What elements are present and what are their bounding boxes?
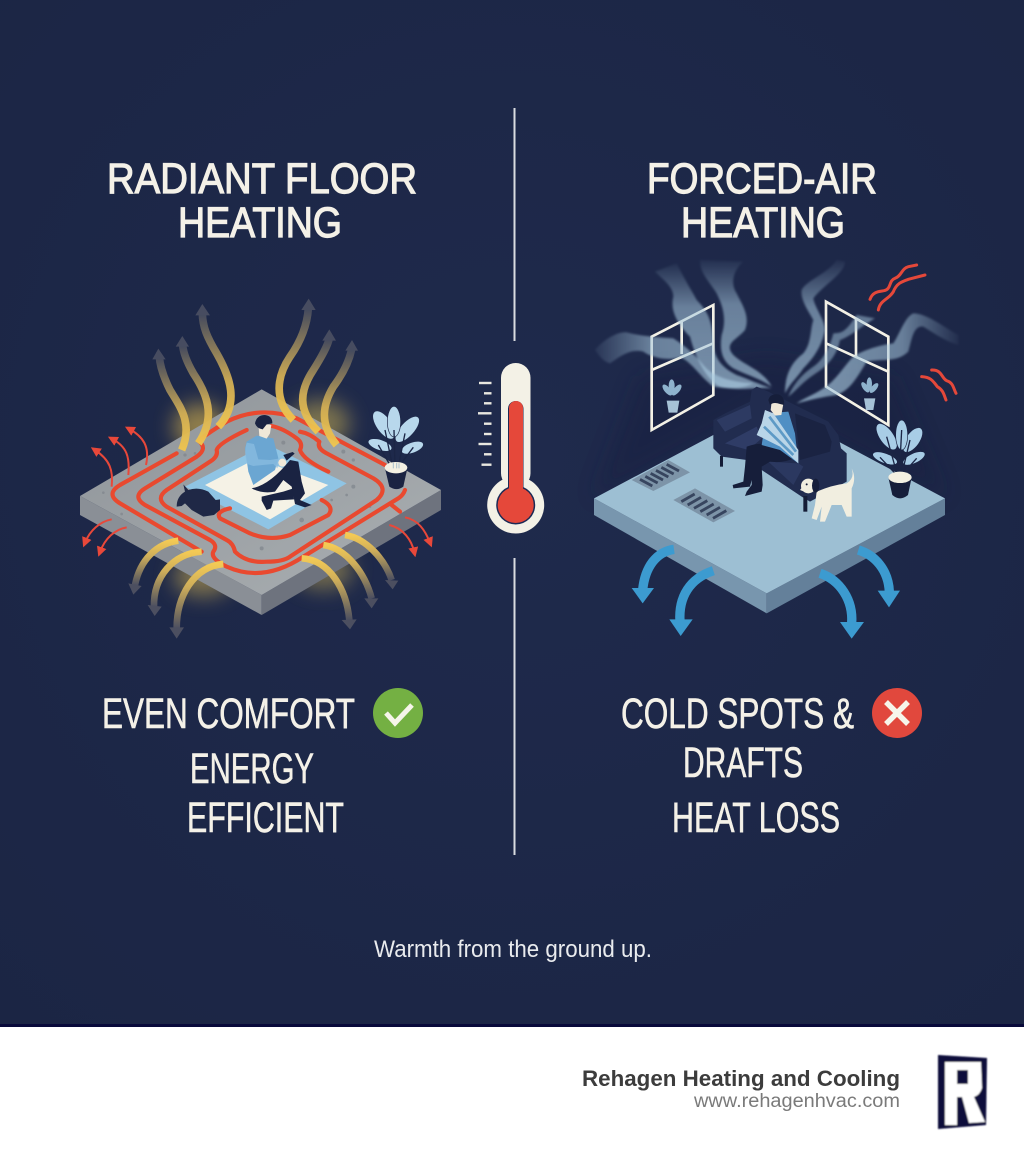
smoke drafts [595, 260, 958, 403]
floor vents [632, 460, 735, 522]
sofa [713, 387, 847, 512]
company name: Rehagen Heating and Cooling [582, 1066, 900, 1091]
floor slab [594, 403, 945, 613]
illustration: radiant floor slab [80, 299, 441, 639]
heading: forced-air heating: FORCED-AIR [647, 155, 877, 203]
carpet [185, 444, 347, 529]
benefits text: radiant [102, 690, 355, 842]
upward heat arrows [159, 308, 352, 450]
drawbacks text: forced-air: COLD SPOTS & [621, 690, 854, 738]
drawbacks text: forced-air: DRAFTS [683, 739, 803, 787]
darker room walls [594, 357, 945, 498]
tagline: Warmth from the ground up. [374, 936, 652, 963]
dog [800, 468, 854, 522]
heading: forced-air heating [647, 155, 877, 247]
heading: radiant floor heating: RADIANT FLOOR [107, 155, 417, 203]
potted plant in left window [661, 379, 683, 413]
person sitting with phone [245, 415, 312, 510]
icon: green check [373, 688, 423, 738]
benefits text: radiant: EFFICIENT [187, 794, 344, 842]
drawbacks text: forced-air [621, 690, 854, 842]
benefits text: radiant: ENERGY [190, 745, 314, 793]
heading: radiant floor heating [107, 155, 417, 247]
footer band [0, 1024, 1024, 1154]
plant in pot [367, 406, 425, 489]
heading: forced-air heating: HEATING [681, 199, 845, 247]
illustration: forced-air room [594, 260, 958, 639]
window left [652, 305, 713, 430]
potted plant in right window [860, 377, 880, 410]
logo [938, 1055, 987, 1129]
heating pipes [112, 412, 405, 573]
small red arrows [85, 429, 430, 552]
arrowheads: upward heat [152, 299, 358, 359]
person wrapped in blanket [733, 394, 798, 496]
heading: radiant floor heating: HEATING [178, 199, 342, 247]
window right [826, 302, 888, 425]
blue heat-loss arrows [632, 549, 900, 639]
cat [177, 484, 220, 517]
drawbacks text: forced-air: HEAT LOSS [672, 794, 840, 842]
company website: www.rehagenhvac.com [693, 1091, 900, 1112]
downward heat arrows [135, 535, 392, 628]
red cold zigzags [870, 265, 956, 400]
icon: red cross [872, 688, 922, 738]
warm glow around slab [173, 400, 353, 597]
arrowheads: downward heat [128, 580, 398, 639]
icon: thermometer [478, 363, 544, 534]
benefits text: radiant: EVEN COMFORT [102, 690, 355, 738]
plant in pot [871, 420, 927, 498]
center divider [514, 108, 516, 855]
slab block [80, 389, 441, 615]
